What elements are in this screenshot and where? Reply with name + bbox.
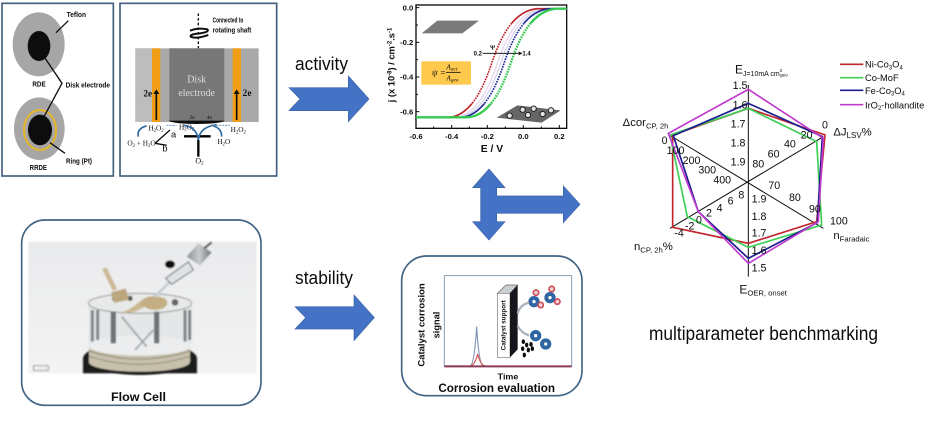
- series: Ni-Co3O4: [673, 108, 825, 243]
- icon: RDE electrode: [13, 12, 65, 76]
- reaction labels: a: [171, 129, 177, 139]
- scale numbers: -4: [674, 228, 684, 240]
- axis labels: 2: [780, 68, 783, 73]
- scale numbers: 1.5: [752, 263, 767, 275]
- scale numbers: 100: [830, 215, 848, 227]
- scale numbers: 400: [713, 174, 731, 186]
- axis numbers: -0.2: [481, 132, 494, 141]
- scale numbers: 60: [768, 148, 780, 160]
- reaction labels: 2: [184, 128, 187, 133]
- scale numbers: 1.8: [752, 211, 767, 223]
- shaft icon: [190, 13, 208, 48]
- signal axis label: [416, 283, 442, 367]
- formula box: geo: [451, 78, 459, 84]
- reaction labels: H: [217, 137, 223, 146]
- signal axis label: Catalyst corrosion: [416, 283, 426, 367]
- axis labels: OER, onset: [747, 289, 788, 298]
- disk electrode label: Disk: [187, 74, 206, 85]
- flat electrode icon: [422, 21, 479, 33]
- axis labels: Δcor: [623, 117, 646, 129]
- scale numbers: 4: [717, 203, 723, 215]
- legend: -hollandite: [881, 100, 924, 110]
- shaft label: rotating shaft: [213, 28, 252, 35]
- reaction labels: 2: [154, 129, 157, 134]
- reaction labels: O: [195, 156, 201, 165]
- reaction labels: 4e: [207, 115, 212, 121]
- legend: Co-MoF: [865, 73, 899, 83]
- scale numbers: 40: [784, 139, 796, 151]
- scale numbers: 1.8: [731, 138, 746, 150]
- scale numbers: 100: [667, 145, 685, 157]
- disk electrode label: [178, 74, 216, 99]
- scale numbers: 0: [696, 214, 702, 226]
- shaft label: Connected to: [213, 17, 243, 24]
- formula box: A: [446, 74, 451, 83]
- icon: RRDE electrode: [14, 97, 65, 160]
- reaction labels: b: [162, 144, 168, 154]
- leader lines: [41, 21, 68, 153]
- reaction labels: 2: [223, 142, 226, 147]
- formula box: A: [446, 63, 451, 72]
- axis numbers: 0.0: [403, 3, 413, 12]
- axis titles: -2: [387, 40, 393, 46]
- rough electrode icon: [497, 105, 561, 123]
- arrow: activity: [289, 76, 369, 122]
- axis numbers: -0.6: [409, 132, 423, 141]
- series: IrO2-hollandite: [668, 89, 823, 263]
- reaction arrows: [138, 89, 240, 157]
- reaction labels: O: [225, 137, 230, 146]
- curves: [416, 8, 567, 118]
- label: activity: activity: [295, 54, 348, 74]
- axis labels: %: [862, 127, 872, 139]
- nanoparticle rings: [530, 286, 560, 348]
- legend: 4: [899, 65, 903, 71]
- psi scale arrow: [474, 44, 531, 58]
- chart: corrosion signal: [416, 276, 572, 382]
- scale numbers: 1.9: [731, 157, 746, 169]
- axis titles: -8: [387, 70, 393, 76]
- reaction labels: [127, 89, 251, 167]
- reaction labels: + H: [135, 139, 149, 148]
- reaction labels: 2: [244, 130, 247, 135]
- catalyst support block: [497, 285, 518, 357]
- reaction labels: 2e: [143, 90, 152, 100]
- reaction labels: H: [231, 125, 236, 134]
- electrode body: [135, 48, 259, 124]
- electrode labels: [30, 10, 110, 172]
- psi scale arrow: 0.2: [474, 52, 483, 58]
- scale numbers: 0: [662, 135, 668, 147]
- series: Fe-Co3O4: [673, 103, 822, 258]
- axis titles: ) / cm: [387, 46, 397, 71]
- reaction labels: 2: [201, 162, 204, 167]
- axis titles: -1: [387, 27, 393, 33]
- axis titles: [387, 27, 503, 155]
- electrode labels: RDE: [32, 79, 46, 88]
- shaft label: [213, 17, 252, 35]
- panel: rotating disk cross section: [120, 3, 277, 176]
- axis numbers: 0.2: [554, 132, 565, 141]
- scale numbers: 80: [752, 158, 764, 170]
- time axis label: Time: [498, 372, 519, 382]
- scale numbers: 1.7: [731, 118, 746, 130]
- axis labels: %: [663, 241, 673, 253]
- axis titles: j (x 10: [387, 76, 397, 102]
- axis labels: LSV: [847, 131, 862, 140]
- axis labels: E: [735, 62, 743, 76]
- reaction labels: 2: [161, 129, 164, 134]
- psi scale arrow: 1.4: [522, 52, 531, 58]
- reaction labels: O: [150, 139, 156, 148]
- axis numbers: -0.6: [400, 107, 413, 116]
- catalyst support block: Catalyst support: [500, 299, 507, 350]
- electrode labels: Teflon: [67, 10, 86, 19]
- corrosion heading: Corrosion evaluation: [438, 381, 555, 395]
- scale numbers: 1.5: [733, 80, 748, 92]
- axis labels: [623, 62, 872, 298]
- axis labels: geo: [780, 73, 788, 78]
- axis titles: .s: [387, 33, 397, 41]
- axis numbers: -0.4: [445, 132, 459, 141]
- reaction labels: H: [148, 124, 154, 133]
- reaction labels: 2: [192, 128, 195, 133]
- label: stability: stability: [295, 268, 353, 288]
- legend: [840, 60, 924, 112]
- scale numbers: 0: [822, 120, 828, 132]
- heading: multiparameter benchmarking: multiparameter benchmarking: [649, 324, 878, 345]
- panel: corrosion evaluation: [402, 256, 582, 396]
- axis labels: Faradaic: [840, 234, 870, 243]
- scale numbers: 2: [706, 208, 712, 220]
- axis labels: CP, 2h: [646, 121, 668, 130]
- reaction labels: O: [187, 122, 192, 131]
- electrode labels: Ring (Pt): [66, 157, 92, 166]
- axis labels: ΔJ: [833, 127, 847, 139]
- radar axes: [669, 85, 823, 277]
- reaction labels: 2: [133, 144, 136, 149]
- disk electrode label: electrode: [178, 88, 216, 99]
- series: Co-MoF: [670, 108, 822, 247]
- legend: O: [894, 86, 902, 96]
- psi scale arrow: Ψ: [490, 44, 496, 51]
- scale numbers: [662, 80, 848, 275]
- legend: 3: [889, 65, 893, 71]
- scale numbers: 80: [789, 192, 801, 204]
- axis numbers: -0.4: [400, 73, 414, 82]
- formula box: ψ =: [432, 68, 446, 78]
- scale numbers: 200: [683, 155, 701, 167]
- legend: 2: [878, 106, 882, 112]
- axis labels: CP, 2h: [640, 245, 663, 254]
- scale numbers: 1.6: [733, 99, 748, 111]
- scale numbers: 300: [698, 164, 716, 176]
- reaction labels: O: [156, 124, 161, 133]
- reaction labels: 2: [148, 144, 151, 149]
- arrow: stability: [295, 295, 374, 341]
- reaction labels: O: [127, 139, 133, 148]
- legend: Fe-Co: [865, 86, 891, 96]
- signal axis label: signal: [432, 312, 442, 338]
- scale numbers: -2: [685, 220, 695, 232]
- axis numbers: 0.0: [518, 132, 529, 141]
- arrow: double headed to benchmarking: [473, 169, 580, 240]
- scale numbers: 8: [738, 189, 744, 201]
- legend: IrO: [865, 100, 878, 110]
- reaction labels: 2e: [243, 89, 251, 99]
- axis titles: E / V: [481, 144, 503, 155]
- legend: 3: [891, 92, 895, 98]
- electrode labels: RRDE: [30, 163, 47, 172]
- scale numbers: 1.7: [752, 228, 767, 240]
- scale numbers: 90: [809, 203, 821, 215]
- legend: 4: [902, 92, 906, 98]
- photo: flow cell: [28, 242, 257, 375]
- reaction labels: 2: [236, 130, 239, 135]
- panel: RDE and RRDE electrodes: [2, 3, 113, 176]
- scale numbers: 70: [768, 180, 780, 192]
- chart: LSV polarization curves: [387, 4, 568, 152]
- electrode labels: Disk electrode: [66, 80, 110, 89]
- scale numbers: 6: [728, 195, 734, 207]
- dissolved particles: [521, 339, 534, 357]
- chart: radar multiparameter benchmark: [623, 60, 924, 298]
- legend: O: [892, 60, 899, 70]
- axis ticks: [416, 8, 559, 128]
- legend: Ni-Co: [865, 60, 889, 70]
- scale numbers: 20: [801, 130, 813, 142]
- scale numbers: 1.6: [752, 245, 767, 257]
- axis labels: n: [634, 241, 640, 253]
- axis numbers: [400, 3, 565, 141]
- scale numbers: 1.9: [752, 193, 767, 205]
- axis numbers: -0.2: [400, 38, 413, 47]
- axis labels: n: [833, 230, 840, 242]
- axis labels: J=10mA cm: [743, 71, 780, 78]
- formula box: act: [451, 67, 458, 73]
- reaction labels: 2e: [189, 115, 195, 121]
- flow cell label: Flow Cell: [111, 390, 166, 404]
- reaction labels: O: [238, 125, 244, 134]
- panel: flow cell: [22, 220, 261, 405]
- axis labels: E: [739, 282, 747, 296]
- reaction labels: H: [179, 122, 184, 131]
- formula box: [421, 61, 471, 85]
- curved arrows: [518, 303, 529, 335]
